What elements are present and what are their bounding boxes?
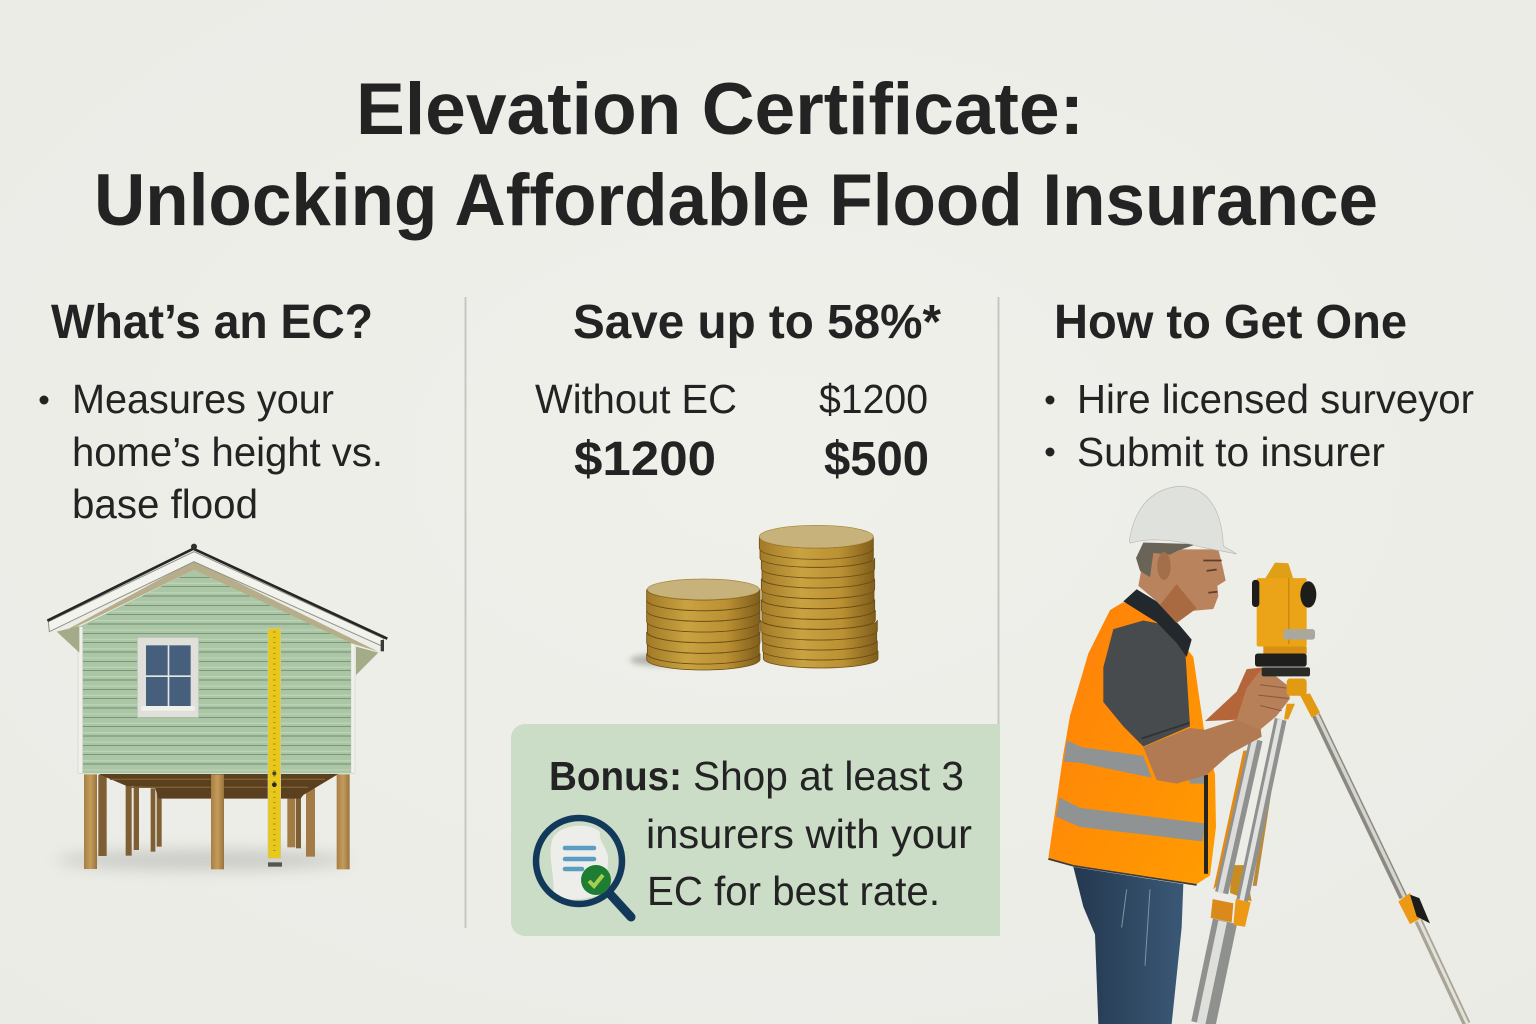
icon: elevated house with measuring staff [47,544,387,870]
text block: steps: Submit to insurer [1077,429,1385,475]
panel: what's an EC [40,296,387,870]
tripod [1201,715,1467,1024]
price comparison: Without EC [535,376,737,422]
jeans [1073,867,1183,1024]
price comparison: $1200 [574,433,716,486]
bonus text: EC for best rate. [647,868,940,914]
price comparison: $500 [824,433,929,486]
arms and hands [1143,667,1290,784]
price comparison: $1200 [819,376,928,422]
panel: savings [511,296,1000,936]
window [137,637,199,717]
title: Unlocking Affordable Flood Insurance [94,160,1378,241]
panel: how to get one [1046,296,1474,1024]
bonus text: Shop at least 3 [693,753,964,799]
heading: how to get one: How to Get One [1054,296,1407,349]
callout: bonus tip [511,724,1000,936]
shirt [1103,589,1192,746]
title [94,69,1378,241]
price comparison [535,376,929,486]
text block: EC definition [40,376,383,527]
measuring staff [268,628,282,867]
head and helmet [1129,486,1237,623]
icon: magnifier over document [536,818,631,917]
heading: save up to 58%: Save up to 58%* [573,296,941,349]
safety vest [1048,602,1216,885]
bonus text [549,753,972,914]
text block: steps [1046,376,1474,475]
text block: EC definition: base flood [72,481,258,527]
text block: steps: Hire licensed surveyor [1077,376,1474,422]
icon: coin stacks [630,525,878,670]
text block: EC definition: home’s height vs. [72,429,383,475]
icon: surveyor with theodolite on tripod [1048,486,1467,1024]
text block: EC definition: Measures your [72,376,334,422]
theodolite [1252,563,1320,719]
bonus text: insurers with your [646,811,972,857]
heading: what's an EC: What’s an EC? [51,296,373,349]
bonus text: Bonus: [549,753,682,799]
title: Elevation Certificate: [356,69,1084,150]
